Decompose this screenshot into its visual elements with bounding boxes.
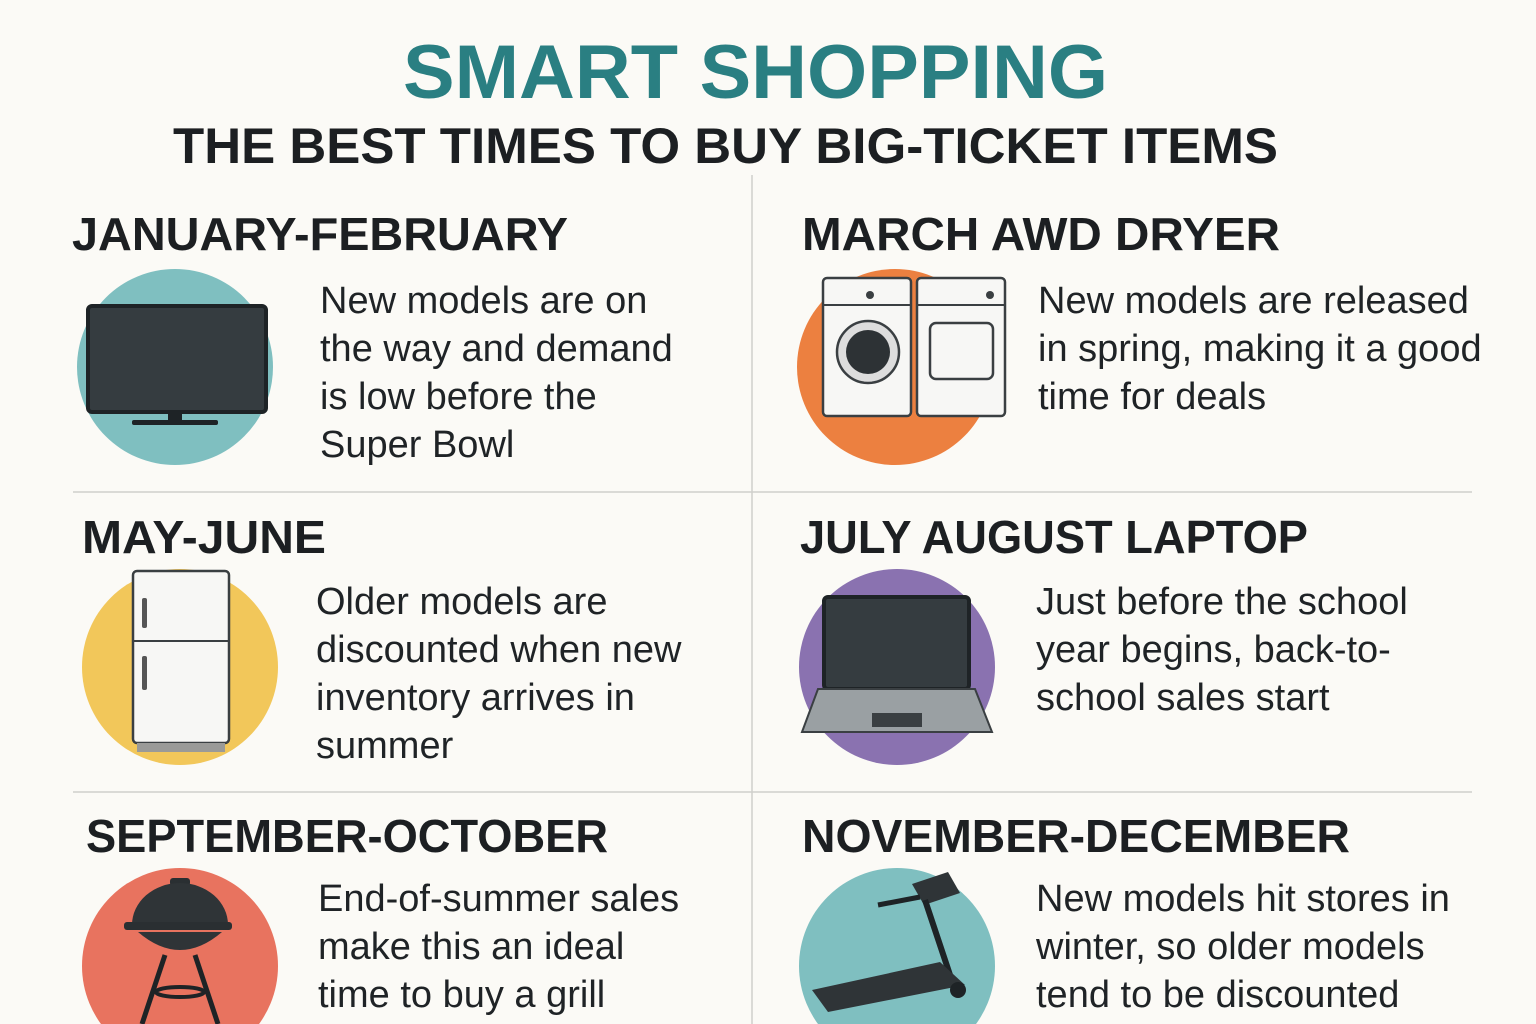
panel: january-february: JANUARY-FEBRUARY: [72, 208, 568, 260]
icon: grill: [82, 868, 278, 1024]
panel: september-october: make this an ideal: [318, 926, 624, 968]
panel: january-february: [72, 208, 673, 466]
panel: march: [797, 208, 1482, 465]
panel: may-june: summer: [316, 725, 454, 767]
panel: july-august: Just before the school: [1036, 581, 1408, 623]
panel: january-february: New models are on: [320, 280, 647, 322]
panel: september-october: End-of-summer sales: [318, 878, 679, 920]
panel: september-october: time to buy a grill: [318, 974, 605, 1016]
panel: march: time for deals: [1038, 376, 1266, 418]
panel: may-june: Older models are: [316, 581, 607, 623]
panel: september-october: SEPTEMBER-OCTOBER: [86, 810, 608, 862]
icon: laptop: [799, 569, 995, 765]
panel: july-august: school sales start: [1036, 677, 1330, 719]
icon: tv: [77, 269, 273, 465]
panel: november-december: NOVEMBER-DECEMBER: [802, 810, 1350, 862]
subtitle: THE BEST TIMES TO BUY BIG-TICKET ITEMS: [173, 118, 1278, 174]
panel: january-february: is low before the: [320, 376, 597, 418]
panel: may-june: inventory arrives in: [316, 677, 635, 719]
icon: treadmill: [799, 868, 995, 1024]
panel: may-june: [82, 511, 682, 767]
panel: july-august: JULY AUGUST LAPTOP: [800, 511, 1308, 563]
panel: may-june: MAY-JUNE: [82, 511, 326, 563]
panel: july-august: [799, 511, 1408, 765]
icon: fridge: [82, 569, 278, 765]
panel: september-october: [82, 810, 679, 1024]
title: SMART SHOPPING: [403, 30, 1108, 115]
panel: march: MARCH AWD DRYER: [802, 208, 1280, 260]
panel: november-december: winter, so older models: [1035, 926, 1425, 968]
panel: march: New models are released: [1038, 280, 1469, 322]
panel: january-february: Super Bowl: [320, 424, 514, 466]
panel: march: in spring, making it a good: [1038, 328, 1482, 370]
panel: november-december: tend to be discounted: [1036, 974, 1399, 1016]
panel: november-december: [799, 810, 1450, 1024]
panel: january-february: the way and demand: [320, 328, 673, 370]
icon: washer and dryer: [797, 269, 1005, 465]
panel: july-august: year begins, back-to-: [1036, 629, 1391, 671]
panel: november-december: New models hit stores in: [1036, 878, 1450, 920]
panel: may-june: discounted when new: [316, 629, 682, 671]
